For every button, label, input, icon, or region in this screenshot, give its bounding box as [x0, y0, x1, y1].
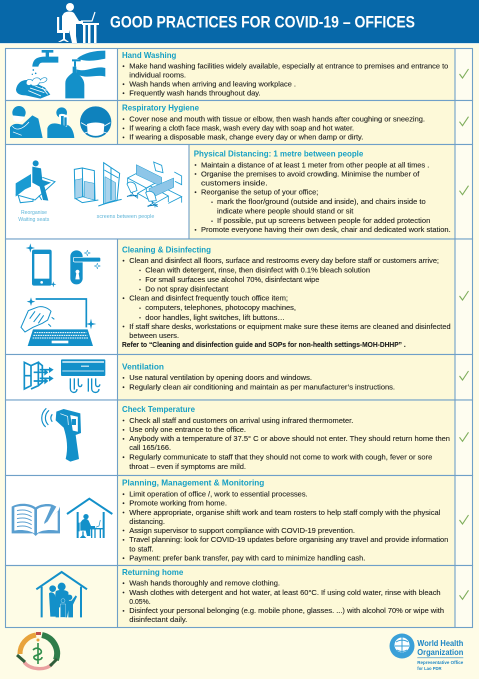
text block: distancing. — [129, 517, 165, 526]
text block — [123, 62, 448, 98]
logo: World Health Organization: World Health — [417, 638, 463, 648]
caption: reorganise waiting seats: Reorganise — [21, 210, 47, 216]
panel: returning home — [6, 566, 472, 628]
text block: Maintain a distance of at least 1 meter from other people at all times . — [201, 160, 429, 169]
text block: customers inside. — [201, 178, 268, 187]
text block: Do not spray disinfectant — [145, 284, 228, 294]
text block: Reorganise the setup of your office; — [201, 188, 318, 196]
icon: waiting seat and office screens — [16, 160, 182, 207]
text block: computers, telephones, photocopy machines, — [145, 303, 296, 312]
caption: screens between people: screens between people — [97, 214, 154, 220]
text block — [123, 578, 444, 624]
text block: Anybody with a temperature of 37.5° C or above should not enter. They should return home then — [129, 434, 450, 443]
text block: Use natural ventilation by opening doors and windows. — [129, 373, 312, 382]
icon: infrared thermometer — [42, 408, 81, 462]
text block — [123, 373, 395, 392]
text block: If wearing a disposable mask, change every day or when damp or dirty. — [129, 133, 363, 142]
icon: check mark — [460, 291, 468, 300]
text block: Promote everyone having their own desk, chair and dedicated work station. — [201, 225, 451, 234]
text block — [195, 160, 451, 234]
icon: person working at desk — [57, 3, 99, 43]
text block: between users. — [129, 331, 179, 340]
icon: check mark — [460, 590, 468, 599]
heading: Physical Distancing: 1 metre between people — [194, 150, 364, 158]
text block: Refer to “Cleaning and disinfection guide and SOPs for non-health settings-MOH-DHHP” . — [122, 340, 406, 349]
heading: Check Temperature — [122, 405, 195, 414]
logo: World Health Organization: Representative Office — [417, 660, 464, 665]
text block: Make hand washing facilities widely available, especially at entrance to premises and entrance to — [129, 62, 448, 70]
text block: Clean with detergent, rinse, then disinfect with 0.1% bleach solution — [145, 266, 370, 274]
icon: phone, door handle and laptop cleaning — [21, 243, 101, 346]
text block: Wash clothes with detergent and hot water, at least 60°C. If using cold water, rinse with bleach — [129, 588, 441, 597]
icon: window and air conditioner — [24, 359, 105, 392]
text block: Travel planning: look for COVID-19 updates before organising any travel and provide information — [129, 535, 448, 544]
header banner — [0, 0, 479, 44]
heading: Hand Washing — [122, 51, 176, 60]
text block: disinfectant daily. — [129, 615, 187, 624]
icon: hand washing and sanitiser — [10, 50, 111, 138]
text block: throat – even if symptoms are mild. — [129, 462, 246, 471]
text block: individual rooms. — [129, 70, 186, 80]
logo: Lao Ministry of Health emblem — [17, 632, 57, 669]
text block: Payment: prefer bank transfer, pay with card to minimize handling cash. — [129, 554, 365, 562]
text block: If wearing a cloth face mask, wash every day with soap and hot water. — [129, 124, 354, 133]
text block: mark the floor/ground (outside and inside), and chairs inside to — [217, 197, 426, 206]
heading: Respiratory Hygiene — [122, 104, 199, 112]
text block: If possible, put up screens between people for added protection — [217, 216, 430, 225]
text block — [123, 416, 450, 471]
panel: planning, management and monitoring — [6, 476, 472, 617]
text block — [123, 490, 448, 562]
icon: check mark — [460, 432, 468, 441]
text block: Limit operation of office /, work to essential processes. — [129, 490, 308, 498]
text block: Assign supervisor to support compliance with COVID-19 prevention. — [129, 526, 355, 535]
heading: Planning, Management & Monitoring — [122, 479, 264, 488]
text block — [123, 114, 425, 142]
panel: physical distancing — [6, 144, 472, 239]
text block: Use only one entrance to the office. — [129, 425, 246, 434]
text block: For small surfaces use alcohol 70%, disinfectant wipe — [145, 275, 319, 284]
text block — [122, 256, 451, 349]
heading: Cleaning & Disinfecting — [122, 246, 211, 254]
icon: book and home office — [12, 499, 112, 617]
title: GOOD PRACTICES FOR COVID-19 – OFFICES — [110, 14, 415, 32]
caption: reorganise waiting seats — [18, 210, 50, 223]
heading: Ventilation — [122, 363, 164, 372]
text block: to staff. — [129, 544, 154, 554]
text block: Check all staff and customers on arrival using infrared thermometer. — [129, 416, 353, 425]
icon: check mark — [460, 515, 468, 524]
icon: check mark — [460, 117, 468, 126]
caption: reorganise waiting seats: Waiting seats — [18, 217, 50, 223]
hygiene people — [12, 106, 26, 119]
text block: Regularly clean air conditioning and maintain as per manufacturer’s instructions. — [129, 382, 395, 392]
text block: door handles, light switches, lift buttons… — [145, 313, 285, 322]
text block: Organise the premises to avoid crowding. Minimise the number of — [201, 169, 420, 178]
panel: respiratory hygiene — [6, 100, 472, 144]
text block: Regularly communicate to staff that they should not come to work with cough, fever or sore — [129, 452, 432, 462]
panel: cleaning and disinfecting — [6, 239, 472, 354]
logo: World Health Organization: for Lao PDR — [417, 666, 442, 671]
heading: Returning home — [122, 568, 184, 577]
text block: Clean and disinfect all floors, surface and restrooms every day before staff or customers arrive; — [129, 256, 439, 265]
text block: indicate where people should stand or sit — [217, 206, 353, 216]
logo: World Health Organization — [390, 634, 464, 671]
icon: check mark — [460, 69, 468, 78]
text block: Wash hands thoroughly and remove clothing. — [129, 578, 280, 588]
text block: If staff share desks, workstations or equipment make sure these items are cleaned and disinfected — [129, 322, 451, 331]
text block: Disinfect your personal belonging (e.g. mobile phone, glasses. ...) with alcohol 70% or wipe with — [129, 606, 444, 615]
text block: Cover nose and mouth with tissue or elbow, then wash hands after coughing or sneezing. — [129, 114, 425, 124]
text block: Clean and disinfect frequently touch office item; — [129, 294, 288, 302]
text block: Promote working from home. — [129, 498, 227, 508]
icon: check mark — [460, 371, 468, 380]
text block: 0.05%. — [129, 597, 151, 606]
text block: Wash hands when arriving and leaving workplace . — [129, 80, 296, 88]
logo: World Health Organization: Organization — [417, 647, 463, 657]
text block: Frequently wash hands throughout day. — [129, 88, 261, 98]
icon: check mark — [460, 186, 468, 195]
panel: check temperature — [6, 400, 472, 476]
panel: hand washing — [6, 48, 472, 138]
panel: ventilation — [6, 354, 472, 400]
text block: Where appropriate, organise shift work and team rosters to help staff comply with the physical — [129, 508, 441, 517]
text block: call 165/166. — [129, 443, 171, 452]
